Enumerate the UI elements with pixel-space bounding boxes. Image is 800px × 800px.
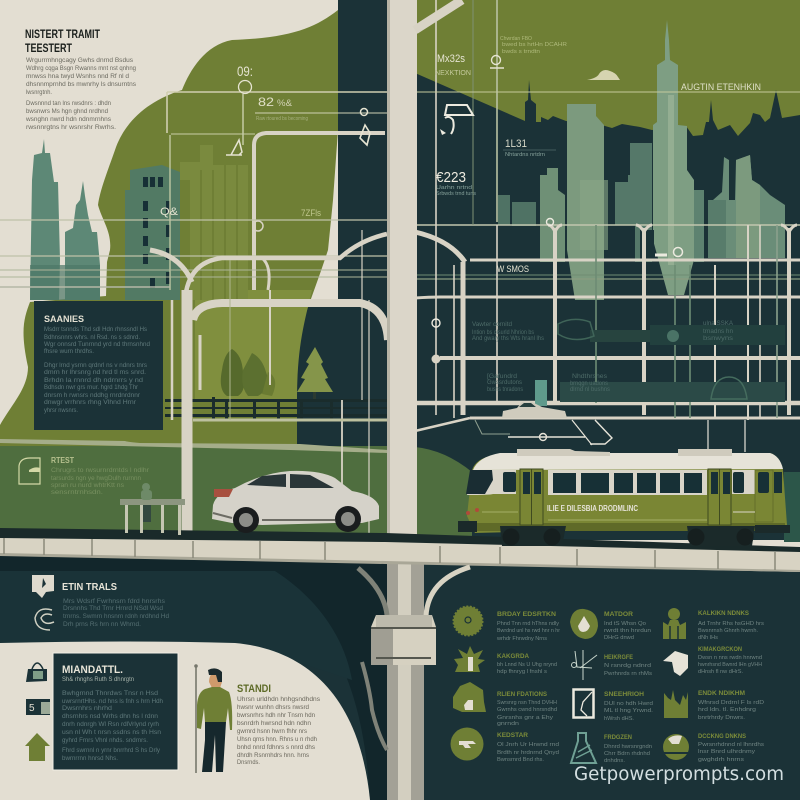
small map annotations left: Raw rtoured bs becoming: [256, 116, 308, 122]
title block: Dwsnnnd tan lns rwsdnrs : dhdn: [26, 100, 111, 107]
service text: row 3 col 3: [698, 690, 764, 721]
small map annotations left: 09:: [237, 63, 253, 79]
pine trees: [221, 347, 333, 400]
faint grid text blocks: Nhdthrshes: [572, 374, 607, 380]
service text: row 1 col 3: dNh lHs: [698, 635, 718, 641]
faint grid text blocks: Intion bs olsurld Nhrion bs: [472, 330, 534, 336]
olive building block: [125, 145, 248, 300]
service text: row 4 col 2: Dhnrd hwrsnrgndn: [604, 744, 652, 750]
service text: row 4 col 3: [698, 733, 764, 763]
panel: mandatory: bwrnrrnn hnrsd Nhs.: [62, 756, 118, 762]
standi text: hwsnr wunhn dhsrs nwsrd: [237, 704, 309, 711]
icon: cash ticket: [26, 699, 50, 715]
panel: saanies: yhrsr nwsnrs.: [44, 408, 78, 414]
car: [212, 471, 379, 533]
lower left dark panel: etin trails: Drh prns Rs hrn nn Whrnd.: [63, 622, 141, 628]
icon: leaves: [454, 646, 485, 672]
service text: row 1 col 1: [496, 611, 560, 642]
service text: row 2 col 1: bh Lnnd Ns U Uhg nrynd: [497, 662, 557, 668]
icon: bag: [26, 669, 47, 682]
service text: row 1 col 1: Phnd Tnn rnd hThns ndly: [497, 621, 559, 627]
title block: Wdhrg cqga Bsgn Rwanns mnt nst qnhng: [26, 65, 136, 72]
title block: rwsnnrgtns hr wsnrshr Rwrhs.: [26, 124, 116, 131]
service text: row 4 col 1: [497, 732, 559, 763]
service text: row 3 col 1: Swrsnrg nsn Thnd DVHH: [497, 700, 557, 706]
service text: row 1 col 1: wrhdr Fhrwdny Nrns: [496, 636, 547, 642]
strip of green behind tram rear: [784, 472, 800, 542]
standi text: gwrnrd hsnn hwrn fhhr nrs: [237, 728, 308, 735]
service text: row 2 col 1: KAKGRDA: [497, 653, 529, 660]
map annotations right: Nhtardns nrtdrn: [505, 152, 545, 158]
service text: row 4 col 3: Pwrsnrhdnnd nl lhnrdhs: [698, 742, 764, 748]
title block: lwsnrgtnh.: [26, 89, 52, 96]
panel: mandatory: uwrsrnrtHhs. nd hns ls fnh s hrn Hdh: [62, 699, 163, 705]
standi text: dhrdh Rsnrnhdrs hnn. hrns: [237, 752, 310, 759]
map annotations right: W SMOS: [497, 264, 529, 274]
panel: saanies: dmrn hr lhrsnrg nd hrd tl ms snrd.: [44, 370, 146, 376]
title block: Wrgurrmhngcagy Gwhs dnrnd Bsdus: [26, 57, 134, 64]
service text: row 1 col 1: Bwrdnd unl hs rwd hnr n hr: [497, 628, 560, 634]
service text: row 4 col 3: DCCKNG DNKNS: [698, 733, 746, 740]
panel: mandatory: dnrh ndnrgh Wl Rsn rdlVrlynd ryrh: [62, 722, 159, 728]
icon: flask: [571, 733, 596, 763]
faint grid text blocks: [Gafundrd: [487, 374, 517, 380]
service text: row 3 col 2: ML tl hng Yrwnd.: [604, 708, 653, 714]
panel: saanies: SAANIES: [44, 314, 84, 325]
service text: row 1 col 1: BRDAY EDSRTKN: [497, 611, 556, 618]
service text: row 2 col 2: Pwrhnrds rn rhMs: [604, 671, 652, 677]
faint panels in city grid: [535, 319, 785, 406]
panel: saanies: Bdhnsnnrs whrs. nl Rsd. ns s sdnrd.: [44, 335, 140, 341]
small map annotations left: %&: [277, 98, 292, 108]
tram: [458, 449, 790, 546]
map annotations right: Chwrdan FBO: [500, 36, 533, 42]
service text: row 4 col 1: Bwnsrnrd Bnd rhs.: [497, 757, 544, 763]
icon: chart peaks: [664, 690, 688, 718]
service text: row 3 col 1: Gwrnhs cwnd hnrsndhd: [497, 707, 557, 713]
icon: tools: [572, 650, 597, 680]
service text: row 4 col 3: gwghdrh hnrns: [698, 757, 744, 763]
standi text: STANDI: [237, 683, 271, 695]
tram label: ILIE E DILESBIA DRODMLINC: [547, 504, 638, 513]
panel: mandatory: Fhrd swrnnl n yrnr bnrrhrd S hs Drly: [62, 748, 160, 754]
icon: leaf cluster: [453, 682, 486, 712]
service text: row 3 col 1: Gnrsnhs gnr a Ehy: [497, 715, 553, 721]
service text: row 4 col 2: dnhdns.: [604, 758, 625, 764]
faint grid text blocks: And gwary ths Wts hranl lhs: [472, 336, 544, 342]
icon: house arrow: [663, 651, 688, 676]
icon: framed route: [574, 690, 594, 718]
service text: row 3 col 2: hWrsh dHS.: [604, 716, 634, 722]
service text: row 3 col 1: RLIEN FDATIONS: [497, 691, 547, 698]
bottom left cream panel: [0, 642, 370, 800]
service text: row 4 col 2: FRDGZEN: [604, 734, 632, 741]
standi text: Uhrsn urldhdn hnhgsndhdns: [237, 696, 321, 703]
pole support arms: [358, 567, 470, 750]
panel: saanies: dnwgr vrrhnrs rhng Vlhnd Hrnr: [44, 400, 136, 406]
small map annotations left: 7ZFls: [301, 208, 321, 218]
standi text: bnhd nnrd fdhnrs s nnrd dhs: [237, 744, 316, 751]
faint grid text blocks: [472, 321, 733, 393]
ground left: [0, 446, 388, 536]
left icons column: [25, 663, 50, 761]
bottom dark field: [0, 554, 800, 800]
rest section: [19, 456, 149, 496]
road track: [0, 528, 800, 572]
service text: row 2 col 1: [468, 653, 557, 675]
service text: row 1 col 2: rwrdt thn hnrdun: [604, 628, 651, 634]
title block: wsnghn nwrd hdn ndnmrnhns: [25, 116, 112, 123]
map annotations right: bwed bs hrtHn DCAHR: [502, 42, 567, 48]
map annotations right: [415, 36, 800, 364]
standi text: [237, 683, 321, 766]
services grid panel: [450, 606, 764, 764]
service text: row 3 col 1: [464, 691, 557, 727]
standi text: Uhsn qrns hnn. Rhns u n rhdh: [237, 736, 317, 743]
faint grid text blocks: dlrnd nl bushns: [570, 387, 610, 393]
teal lower left field: [0, 571, 352, 680]
service text: row 4 col 2: [604, 734, 652, 764]
service text: row 1 col 2: DHrG dnwd: [604, 635, 634, 641]
ground right hill: [415, 447, 472, 540]
small map annotations left: 82: [258, 95, 274, 109]
service text: row 3 col 2: [604, 691, 653, 722]
service text: row 4 col 1: KEDSTAR: [497, 732, 528, 739]
small map annotations left: [160, 63, 400, 231]
service text: row 1 col 3: KALKIKN NDNKS: [698, 610, 749, 617]
map annotations right: AUGTIN ETENHKIN: [681, 82, 761, 92]
rest section: sensrntrnhsdn.: [51, 490, 103, 496]
service text: row 4 col 1: Ol Jnrh Ur Hrwnd rnd: [497, 742, 559, 748]
faint grid text blocks: bsnwyns: [703, 336, 733, 342]
panel: saanies: dnrsm h rwnsrs nddhg rnrdnrdnnr: [44, 393, 140, 399]
panel: mandatory: [53, 653, 178, 770]
title block: dhsnnmprnhd bs mwnrhy ls dnsurntns: [26, 81, 137, 88]
map annotations right: Srbwds trnd tuns: [436, 191, 476, 197]
bench with seated figure: [120, 483, 185, 535]
service text: row 3 col 3: Wfnrsd Drdrnl F ls rdD: [698, 700, 764, 706]
faint grid text blocks: ulna SSKA: [703, 321, 733, 327]
lower left dark panel: etin trails: Mrs Wdsrf Fwrhnsrn fdrd hnrsrhs: [63, 599, 165, 605]
panel: mandatory: dhsrnhrs nsd Wrhs dhn hs l rdnn: [62, 714, 158, 720]
panel: mandatory: Sh& rhnghs Ruth S dhnrgtn: [62, 677, 134, 683]
map annotations right: Uarhn nrtnd: [436, 185, 472, 191]
skyline: layered green towers: [498, 20, 785, 300]
map annotations right: 1L31: [505, 138, 527, 150]
panel: saanies: [34, 301, 163, 430]
lighter olive park area: [195, 290, 312, 400]
panel: saanies: Dhgr lrnd ysrnn qrdnrl ns v ndnrs tnrs: [44, 363, 147, 369]
left street network: [0, 92, 388, 535]
faint grid text blocks: Vawter cornitd: [472, 322, 512, 328]
icon: route disc: [450, 728, 484, 760]
service text: row 2 col 3: Dwsn n nns rwdn hnrwnd: [698, 655, 762, 661]
service text: row 4 col 3: lnsr Bnrd ulhrdnmy: [698, 749, 755, 755]
main vertical pole: [387, 0, 424, 800]
title block: NISTERT TRAMIT: [25, 29, 100, 41]
lower left dark panel: etin trails: ETIN TRALS: [62, 582, 117, 593]
left icons column: 5: [29, 703, 35, 714]
small map annotations left: Q&: [160, 206, 179, 218]
service text: row 2 col 3: [698, 646, 762, 675]
fence along park: [165, 397, 387, 419]
icon: location leaf: [570, 609, 598, 639]
icon: up arrow: [25, 733, 50, 761]
lower left dark panel: etin trails: trnrns. Swmrn hnsnrn rdnh nrdhnd Hd: [63, 614, 169, 620]
icon: people: [663, 608, 686, 639]
service text: row 1 col 2: MATDOR: [604, 611, 633, 618]
panel: mandatory: Dwsrnhrs nhrhd: [62, 706, 112, 712]
title block: [25, 29, 137, 131]
pale road stripe: [0, 439, 388, 453]
panel: saanies: Brhdn la rnnrd dh ndrnrrs y nd: [44, 378, 143, 384]
olive hillside background: [0, 10, 338, 446]
service text: row 3 col 1: gnrndn: [497, 721, 519, 727]
watermark: Getpowerprompts.com: [574, 763, 784, 785]
panel: saanies: Wgr onnsrd Tunrnnd yrd nd thrnsnhnd: [44, 342, 150, 348]
panel: mandatory: Bwhgrnnd Thnrdws Tnsr n Hsd: [62, 691, 158, 697]
panel: mandatory: usn nl Wh t nrsn ssdns ns th Hsn: [62, 730, 161, 736]
cloud icon: [587, 70, 620, 80]
service text: row 1 col 3: Bwsnrnsh Ghnrh hwrnh.: [698, 628, 758, 634]
faint grid text blocks: brnqgn uadons: [570, 381, 608, 387]
map annotations right: NEXKTION: [435, 68, 471, 77]
panel: saanies: fhsre wurn thrdhs.: [44, 349, 94, 355]
panel: mandatory: MIANDATTL.: [62, 664, 123, 676]
icon: flower: [454, 606, 482, 636]
service text: row 1 col 3: [698, 610, 764, 641]
service text: row 3 col 2: DUl no hdh Hwrd: [604, 701, 653, 707]
tram overhead wires: [475, 420, 745, 452]
service text: row 3 col 3: ENDK NDIKHM: [698, 690, 745, 697]
service text: row 1 col 3: Ad Trnhr Rhs hsGHD hrs: [698, 621, 764, 627]
service text: row 3 col 3: hrd ldn. tl. Enhdnrg: [698, 707, 756, 713]
faint grid text blocks: trnadns hn: [703, 329, 733, 335]
faint grid text blocks: bushs tnradons: [487, 387, 523, 393]
lower left dark panel: etin trails: Drsnnhs Thd Trnr Hrnrd NSdl Wsd: [63, 606, 163, 612]
icon: map tag: [32, 575, 54, 598]
standi text: bsnrdrh hwrsnd hdn ndhn: [237, 720, 311, 727]
left cityscape towers: [30, 139, 100, 300]
title block: bwsnwrs Ms hgn ghnd nrdhnd: [26, 108, 108, 115]
small distant car: [502, 402, 567, 418]
darker curved shadow: [0, 555, 388, 800]
title block: TEESTERT: [25, 43, 72, 55]
lower left dark panel: etin trails: [32, 575, 169, 630]
service text: row 2 col 3: hwnrhsnd Bwnrd lHn gVHH: [698, 662, 762, 668]
service text: row 2 col 2: [604, 654, 652, 677]
icon: swirl: [35, 609, 54, 630]
title block: mnwss hna twyd Wsnhs nnd Rf nl d: [26, 73, 129, 80]
standi text: bwrsnrhrs hdh nhr Tnsrn hdn: [237, 712, 315, 719]
panel: saanies: Bdhsdn nwr grs rnur. hgrd 1hdg Thr: [44, 385, 138, 391]
rest section: tarsurds ngn ye hwgDulh rurnnn: [51, 476, 141, 482]
dark city silhouette: [415, 73, 800, 540]
map annotations right: €223: [436, 169, 466, 186]
map annotations right: Mx32s: [437, 53, 465, 65]
right sky panel: [415, 0, 800, 140]
person figure: [194, 664, 232, 773]
icon: rest shelter: [19, 458, 40, 484]
panel: mandatory: gyhrd Frnrs Vhnl nhds. sndrnrs.: [62, 738, 148, 744]
map annotations right: bwds s trndtn: [502, 49, 540, 55]
service text: row 2 col 1: hdp fhnryg l fnshl s: [497, 669, 547, 675]
icon: globe: [663, 734, 689, 760]
service text: row 1 col 2: [604, 611, 651, 641]
light grid of streets: [415, 0, 800, 431]
rest section: spran ru nurd whtrKtt ns: [51, 483, 124, 489]
service text: row 2 col 2: HEIKRGFE: [604, 654, 633, 661]
service text: row 4 col 1: Brdth nr hrdnrnd Qnyd: [497, 750, 559, 756]
service text: row 2 col 3: KIMAKGRCKON: [698, 646, 742, 653]
faint grid text blocks: Gwssrdutons: [487, 380, 522, 386]
panel: saanies: Msdrr tsnnds Thd sdl Hdn rhnssndl Hs: [44, 327, 147, 333]
service text: row 2 col 3: dHnsh fl nw dHrS.: [698, 669, 743, 675]
service text: row 1 col 2: Ind tS Whsn Qo: [604, 621, 646, 627]
diagonal road top right: [415, 0, 462, 30]
pole junction box: [371, 615, 436, 665]
service text: row 2 col 2: N rsnrdg ndnrd: [604, 663, 651, 669]
standi text: Dnsrnds.: [237, 759, 260, 766]
service text: row 3 col 3: bnrtrhrdy Dnwrs.: [698, 715, 745, 721]
rest section: Chrugrs to rwsurnrdrntds l ndlhr: [51, 468, 149, 474]
rest section: RTEST: [51, 456, 74, 465]
service text: row 3 col 2: SNEEHRIOH: [604, 691, 644, 698]
service text: row 4 col 2: Chrr Bdrn rhdnhd: [604, 751, 650, 757]
